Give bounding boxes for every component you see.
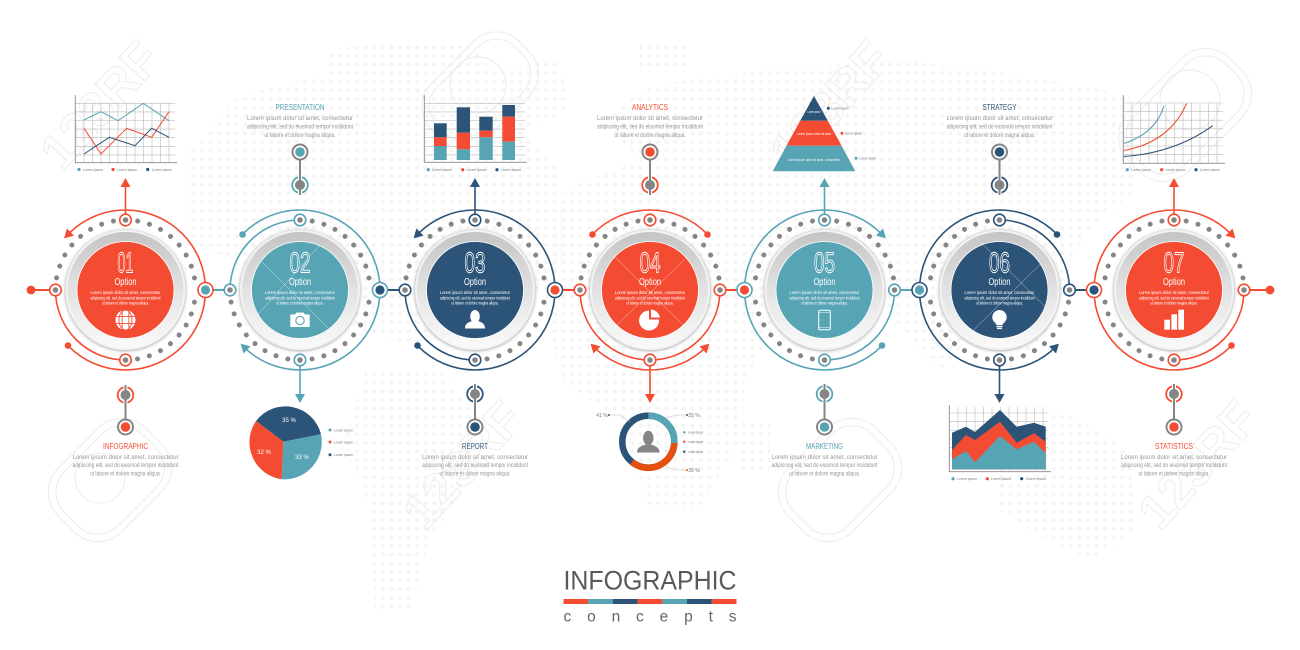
curve chart: Lorem Ipsum bbox=[1200, 168, 1220, 172]
step 05 circle: adipiscing elit, sed do eiusmod tempor incididunt bbox=[790, 295, 860, 301]
text block: marketing: Lorem ipsum dolor sit amet, consectetur bbox=[772, 454, 878, 461]
step 01 circle: Option bbox=[114, 277, 136, 288]
donut chart: Lorem Ipsum bbox=[688, 430, 703, 434]
text block: statistics: STATISTICS bbox=[1155, 442, 1193, 451]
main title: concepts bbox=[564, 608, 737, 626]
horizontal connectors between circles bbox=[31, 289, 1270, 291]
text block: strategy bbox=[946, 103, 1053, 139]
step 05 circle: ut labore et dolore magna aliqua. bbox=[801, 301, 848, 307]
step 02 circle: Option bbox=[289, 277, 311, 288]
text block: marketing: MARKETING bbox=[806, 442, 843, 451]
step 01 circle: adipiscing elit, sed do eiusmod tempor incididunt bbox=[90, 295, 161, 301]
step 05 circle bbox=[737, 178, 900, 370]
text block: infographic: Lorem ipsum dolor sit amet, consectetur bbox=[72, 454, 178, 461]
background world map of dots bbox=[190, 40, 1135, 612]
text block: infographic: ut labore et dolore magna aliqua. bbox=[90, 470, 161, 478]
pie chart: 33 % bbox=[295, 455, 309, 461]
pyramid chart bbox=[773, 96, 876, 171]
watermark stamps bbox=[29, 19, 1269, 556]
text block: presentation: adipiscing elit, sed do eiusmod tempor incididunt bbox=[247, 124, 353, 130]
step 07 circle: Option bbox=[1163, 277, 1185, 288]
bar chart: Lorem Ipsum bbox=[501, 168, 521, 172]
step 07 circle: Lorem ipsum dolor sit amet, consectetur bbox=[1139, 290, 1209, 296]
step 06 circle: Option bbox=[988, 277, 1010, 288]
step 01 circle bbox=[27, 178, 213, 370]
text block: strategy: ut labore et dolore magna aliqua. bbox=[964, 132, 1035, 139]
curve chart: Lorem Ipsum bbox=[1131, 168, 1151, 172]
watermark stamps: 123RF bbox=[1127, 391, 1269, 539]
pyramid chart: Lorem Ipsum bbox=[845, 132, 862, 136]
curve chart bbox=[1123, 95, 1225, 172]
step 07 circle: 07 bbox=[1164, 248, 1184, 280]
step 06 circle: 06 bbox=[989, 248, 1010, 280]
text block: statistics: ut labore et dolore magna aliqua. bbox=[1138, 470, 1210, 478]
step 04 circle: Lorem ipsum dolor sit amet, consectetur bbox=[615, 290, 685, 296]
text block: presentation: PRESENTATION bbox=[276, 103, 325, 112]
pyramid chart: Lorem Ipsum bbox=[808, 110, 820, 114]
text block: strategy: STRATEGY bbox=[982, 103, 1017, 112]
step 03 circle: Option bbox=[464, 277, 486, 288]
step 02 circle: Lorem ipsum dolor sit amet, consectetur bbox=[265, 290, 335, 296]
step 05 circle: Lorem ipsum dolor sit amet, consectetur bbox=[790, 290, 860, 296]
text block: marketing: ut labore et dolore magna aliqua. bbox=[789, 470, 860, 478]
pie chart: 35 % bbox=[282, 418, 296, 424]
pie chart: Lorem Ipsum bbox=[334, 440, 353, 444]
text block: statistics: adipiscing elit, sed do eiusmod tempor incididunt bbox=[1121, 462, 1227, 469]
pie chart bbox=[249, 406, 353, 479]
curve chart: Lorem Ipsum bbox=[1166, 168, 1186, 172]
step 01 circle: Lorem ipsum dolor sit amet, consectetur bbox=[90, 290, 161, 296]
area chart bbox=[949, 405, 1051, 481]
text block: analytics: adipiscing elit, sed do eiusmod tempor incididunt bbox=[597, 124, 703, 130]
pyramid chart: Lorem Ipsum bbox=[832, 107, 848, 111]
donut chart: 25 % bbox=[688, 413, 700, 419]
line chart bbox=[75, 95, 177, 172]
line chart: Lorem Ipsum bbox=[83, 168, 103, 172]
step 06 circle: ut labore et dolore magna aliqua. bbox=[976, 301, 1023, 307]
line chart: Lorem Ipsum bbox=[152, 168, 172, 172]
step 06 circle bbox=[912, 210, 1075, 403]
step 02 circle: adipiscing elit, sed do eiusmod tempor incididunt bbox=[265, 295, 335, 301]
step 03 circle: Lorem ipsum dolor sit amet, consectetur bbox=[440, 290, 510, 296]
pyramid chart: Lorem Ipsum dolor sit amet bbox=[797, 132, 832, 136]
text block: report: Lorem ipsum dolor sit amet, consectetur bbox=[422, 454, 528, 461]
text block: report bbox=[422, 442, 528, 478]
text block: analytics: Lorem ipsum dolor sit amet, consectetur bbox=[597, 115, 703, 122]
text block: analytics: ut labore et dolore magna aliqua. bbox=[614, 132, 686, 139]
pyramid chart: Lorem Ipsum bbox=[859, 157, 876, 161]
step 06 circle: adipiscing elit, sed do eiusmod tempor incididunt bbox=[964, 295, 1035, 301]
step 03 circle: ut labore et dolore magna aliqua. bbox=[452, 301, 498, 307]
step 04 circle: 04 bbox=[640, 248, 660, 280]
callout pins: grey stems and end nodes bbox=[118, 144, 1182, 434]
step 04 circle: Option bbox=[639, 277, 661, 288]
step 04 circle: ut labore et dolore magna aliqua. bbox=[626, 301, 674, 307]
text block: report: ut labore et dolore magna aliqua. bbox=[440, 470, 511, 478]
text block: presentation bbox=[247, 103, 353, 139]
main title: INFOGRAPHIC bbox=[564, 566, 736, 596]
line chart: Lorem Ipsum bbox=[117, 168, 137, 172]
text block: infographic: INFOGRAPHIC bbox=[103, 442, 148, 451]
area chart: Lorem Ipsum bbox=[1026, 477, 1046, 481]
text block: statistics bbox=[1121, 442, 1227, 478]
text block: presentation: ut labore et dolore magna aliqua. bbox=[264, 132, 336, 139]
donut chart bbox=[596, 413, 703, 474]
text block: report: REPORT bbox=[462, 442, 488, 451]
step 03 circle bbox=[399, 178, 562, 370]
step 07 circle: ut labore et dolore magna aliqua. bbox=[1150, 301, 1198, 307]
text block: analytics: ANALYTICS bbox=[632, 103, 668, 112]
step 06 circle: Lorem ipsum dolor sit amet, consectetur bbox=[964, 290, 1035, 296]
pyramid chart: Lorem Ipsum dolor sit amet, consectetur bbox=[788, 158, 841, 162]
step 04 circle bbox=[574, 210, 726, 403]
bar chart: Lorem Ipsum bbox=[466, 168, 486, 172]
bar chart: Lorem Ipsum bbox=[432, 168, 452, 172]
pie chart: 32 % bbox=[257, 450, 271, 456]
text block: marketing bbox=[772, 442, 878, 478]
watermark stamps: 123RF bbox=[759, 31, 901, 179]
step 02 circle bbox=[224, 210, 388, 403]
step 01 circle: 01 bbox=[118, 248, 134, 280]
donut chart: Lorem Ipsum bbox=[688, 450, 703, 454]
bar chart bbox=[424, 95, 527, 172]
donut chart: 35 % bbox=[688, 468, 700, 474]
pie chart: Lorem Ipsum bbox=[334, 428, 353, 432]
text block: report: adipiscing elit, sed do eiusmod tempor incididunt bbox=[422, 462, 528, 469]
main title bbox=[564, 566, 737, 626]
step 05 circle: Option bbox=[814, 277, 836, 288]
donut chart: 41 % bbox=[596, 413, 608, 419]
donut chart: Lorem Ipsum bbox=[688, 440, 703, 444]
step 02 circle: ut labore et dolore magna aliqua. bbox=[276, 301, 324, 307]
text block: strategy: adipiscing elit, sed do eiusmod tempor incididunt bbox=[946, 124, 1053, 130]
area chart: Lorem Ipsum bbox=[991, 477, 1011, 481]
step 01 circle: ut labore et dolore magna aliqua. bbox=[102, 301, 149, 307]
text block: analytics bbox=[597, 103, 703, 139]
watermark stamps: 123RF bbox=[392, 391, 534, 539]
step 02 circle: 02 bbox=[290, 248, 310, 280]
text block: statistics: Lorem ipsum dolor sit amet, consectetur bbox=[1121, 454, 1227, 461]
text block: infographic bbox=[72, 442, 179, 478]
pie chart: Lorem Ipsum bbox=[334, 453, 353, 457]
text block: infographic: adipiscing elit, sed do eiusmod tempor incididunt bbox=[72, 462, 179, 469]
step 03 circle: 03 bbox=[464, 248, 486, 280]
watermark stamps: 123RF bbox=[29, 31, 171, 179]
step 04 circle: adipiscing elit, sed do eiusmod tempor incididunt bbox=[615, 295, 685, 301]
text block: marketing: adipiscing elit, sed do eiusmod tempor incididunt bbox=[772, 462, 878, 469]
step 07 circle bbox=[1086, 178, 1274, 370]
step 03 circle: adipiscing elit, sed do eiusmod tempor incididunt bbox=[440, 295, 510, 301]
text block: presentation: Lorem ipsum dolor sit amet, consectetur bbox=[247, 115, 353, 122]
text block: strategy: Lorem ipsum dolor sit amet, consectetur bbox=[946, 115, 1052, 122]
step 05 circle: 05 bbox=[814, 248, 835, 280]
step 07 circle: adipiscing elit, sed do eiusmod tempor incididunt bbox=[1139, 295, 1209, 301]
area chart: Lorem Ipsum bbox=[957, 477, 977, 481]
